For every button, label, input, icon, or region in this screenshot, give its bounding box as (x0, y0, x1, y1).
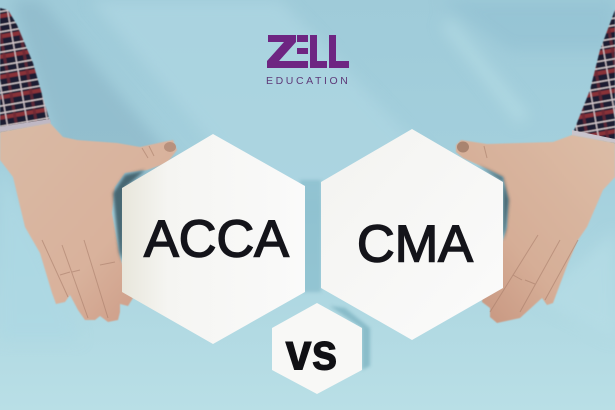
hexagon: CMA (321, 129, 503, 340)
logo letter E (293, 35, 308, 68)
logo: Zell Education (266, 35, 350, 87)
logo letter L (329, 35, 349, 68)
label: vs: vs (286, 324, 338, 382)
finger creases (42, 146, 154, 318)
hexagon shadows (113, 165, 509, 370)
label: ACCA: ACCA (144, 210, 289, 268)
hexagon: vs (272, 303, 362, 394)
left sleeve (0, 8, 51, 132)
logo letter L (310, 35, 327, 68)
left hand (0, 123, 177, 322)
logo text: EDUCATION: EDUCATION (266, 75, 350, 87)
hexagon: ACCA (122, 134, 305, 344)
label: CMA: CMA (357, 216, 473, 274)
finger creases (484, 146, 578, 312)
right hand (456, 135, 615, 323)
right sleeve (572, 10, 615, 143)
logo letter Z (267, 35, 296, 68)
